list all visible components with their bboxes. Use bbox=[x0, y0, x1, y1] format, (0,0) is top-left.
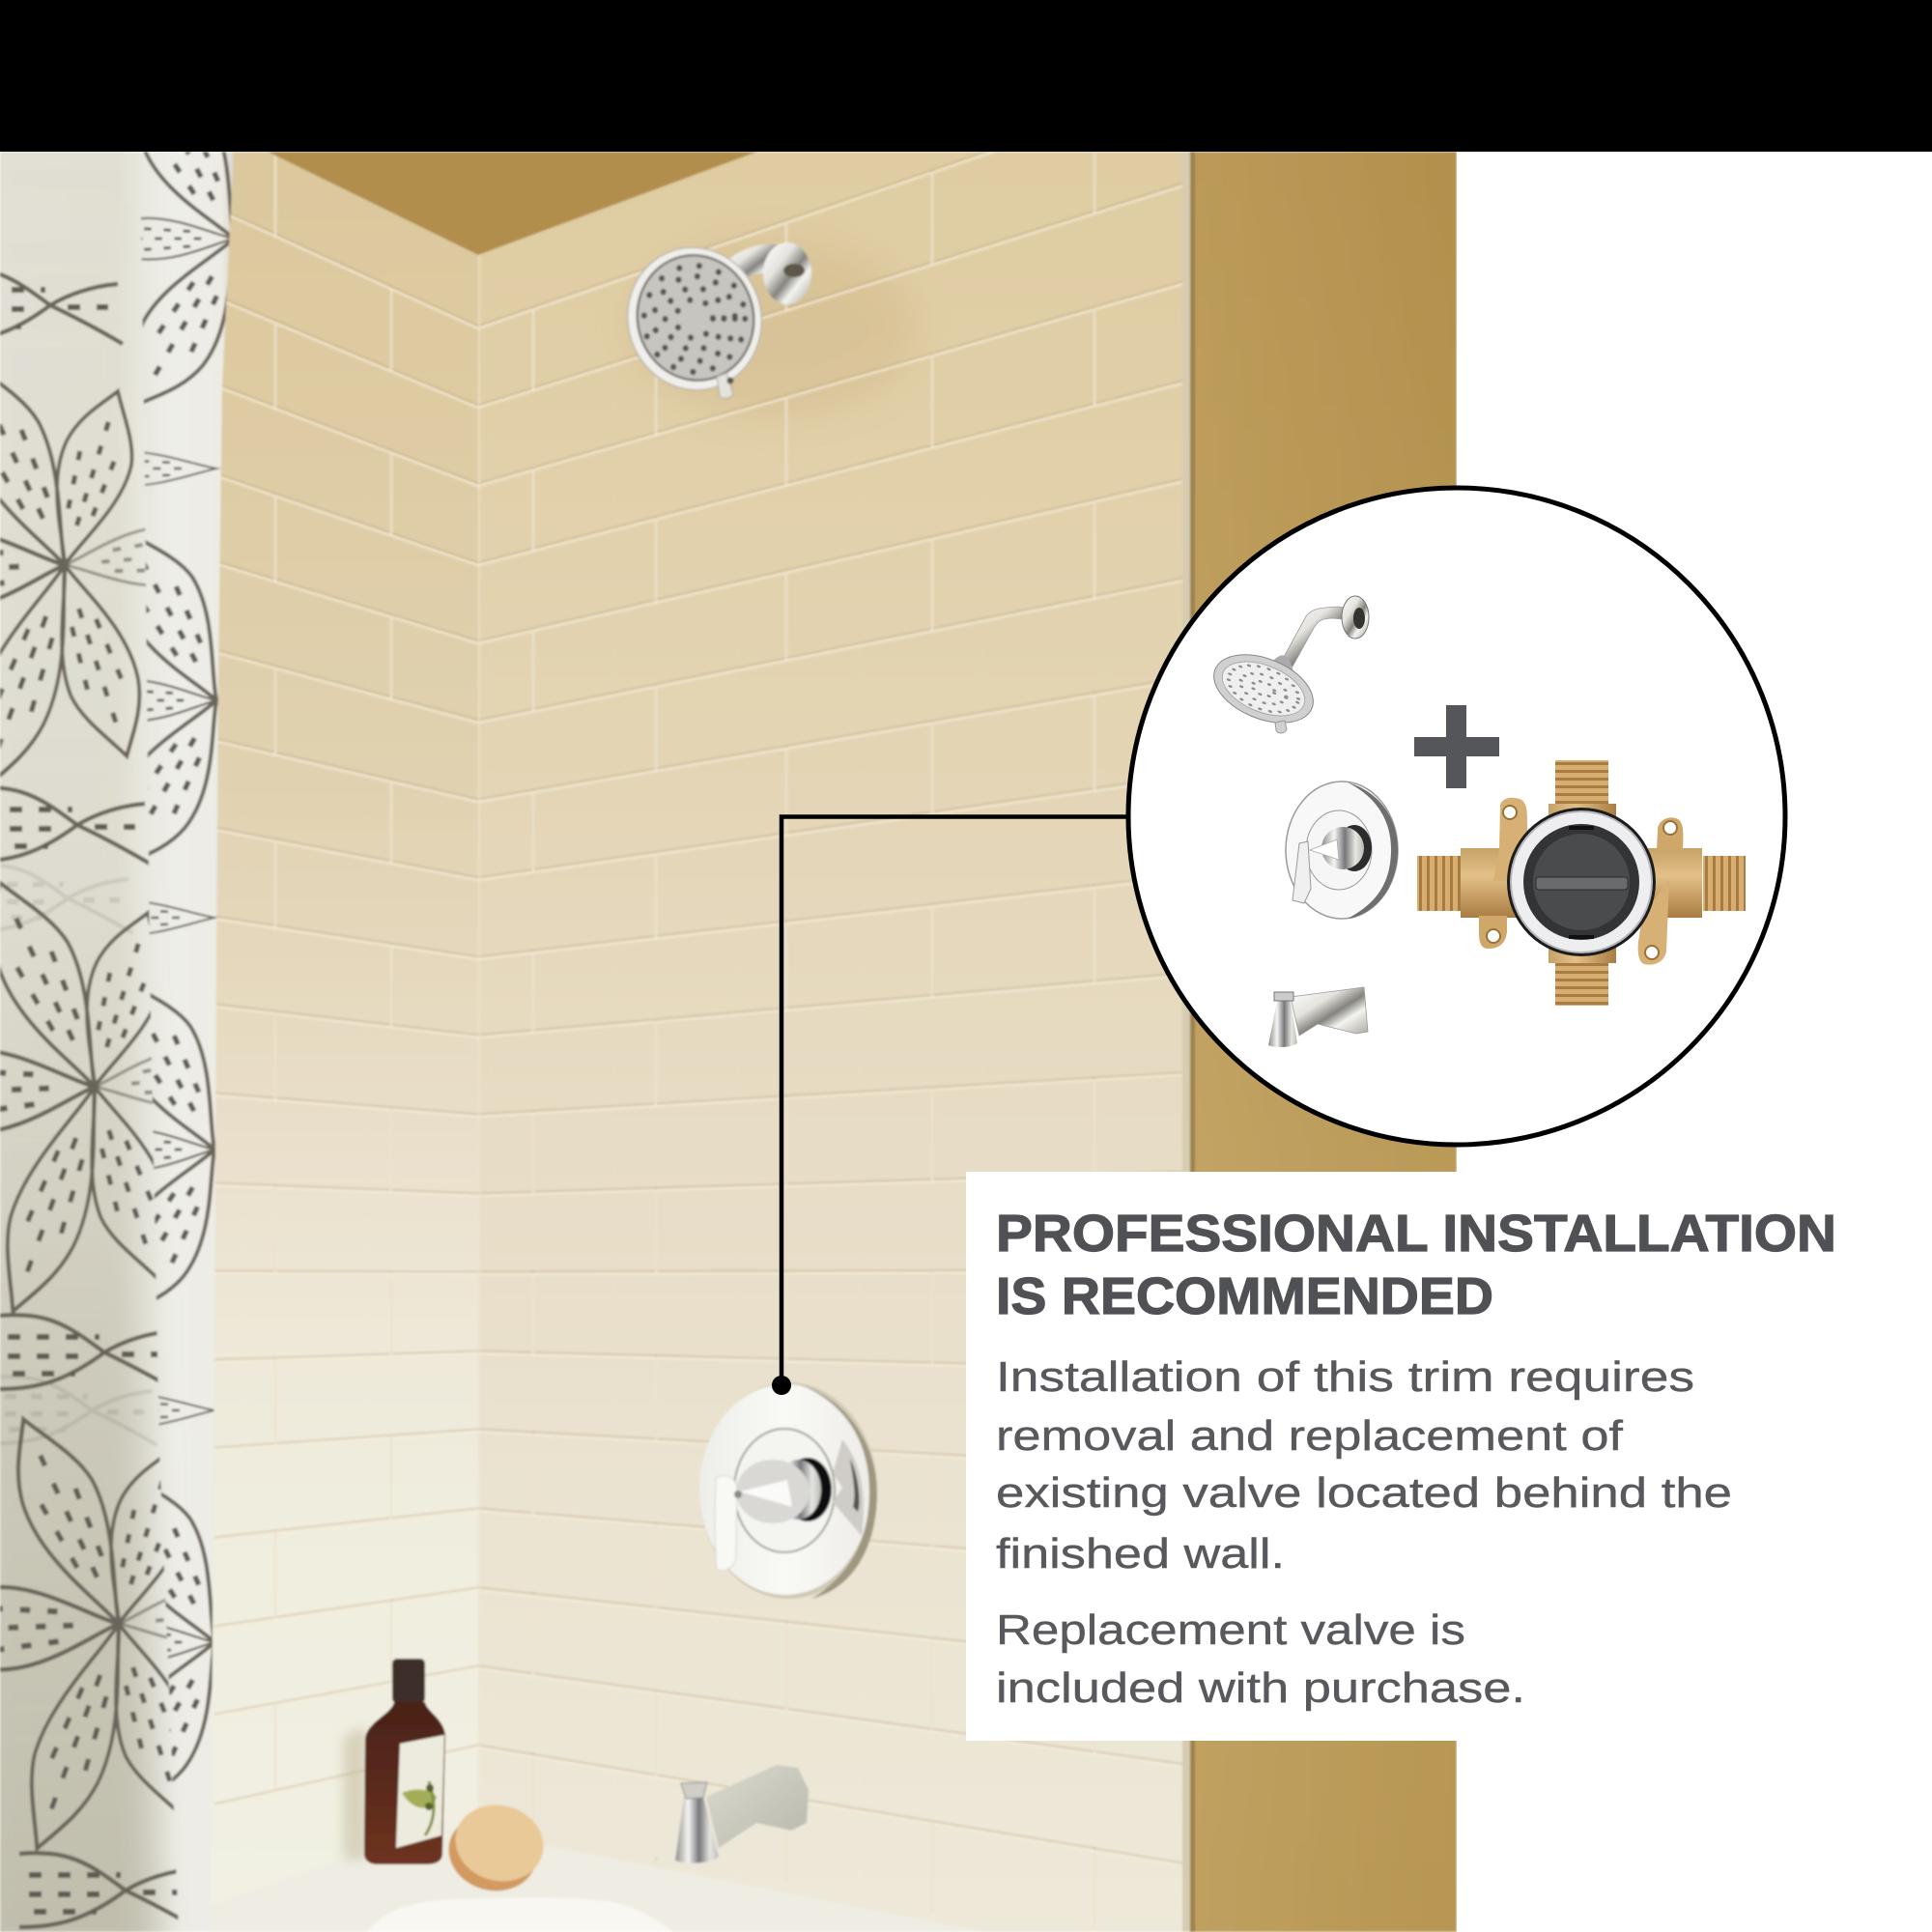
gold wall strip bbox=[1190, 152, 1457, 1932]
body paragraph: trim requirement: existing valve located behind the bbox=[996, 1470, 1732, 1517]
white right panel bbox=[1457, 152, 1932, 1932]
body paragraph: trim requirement bbox=[996, 1354, 1732, 1577]
heading: PROFESSIONAL INSTALLATION bbox=[996, 1205, 1836, 1263]
icon: plus sign bbox=[1414, 705, 1499, 788]
tub bbox=[193, 1826, 985, 1932]
body paragraph: valve included: Replacement valve is bbox=[996, 1607, 1465, 1654]
text panel bbox=[966, 1172, 1836, 1741]
icon: small valve trim bbox=[1286, 781, 1398, 919]
tub spout bbox=[675, 1765, 809, 1863]
icon: small tub spout bbox=[1268, 987, 1368, 1047]
body paragraph: trim requirement: Installation of this trim requires bbox=[996, 1354, 1694, 1401]
callout circle: components bbox=[1128, 488, 1785, 1145]
shower head bbox=[612, 234, 811, 404]
shower curtain bbox=[0, 152, 235, 1932]
icon: small shower head bbox=[1204, 596, 1369, 736]
body paragraph: valve included: included with purchase. bbox=[996, 1665, 1525, 1712]
tiled wall bbox=[193, 81, 1195, 1932]
shampoo bottle bbox=[343, 1659, 445, 1864]
bath brush bbox=[440, 1795, 553, 1901]
icon: brass rough-in valve bbox=[1417, 760, 1746, 1006]
body paragraph: valve included bbox=[996, 1607, 1525, 1712]
body paragraph: trim requirement: finished wall. bbox=[996, 1531, 1285, 1577]
bathroom photo bbox=[0, 0, 1457, 1932]
body paragraph: trim requirement: removal and replacement of bbox=[996, 1413, 1624, 1460]
connector line with dot bbox=[772, 817, 1130, 1395]
valve trim plate bbox=[699, 1382, 877, 1599]
heading: IS RECOMMENDED bbox=[996, 1267, 1493, 1325]
top black band bbox=[0, 0, 1932, 152]
heading bbox=[996, 1205, 1836, 1325]
gold ceiling bbox=[268, 152, 757, 255]
